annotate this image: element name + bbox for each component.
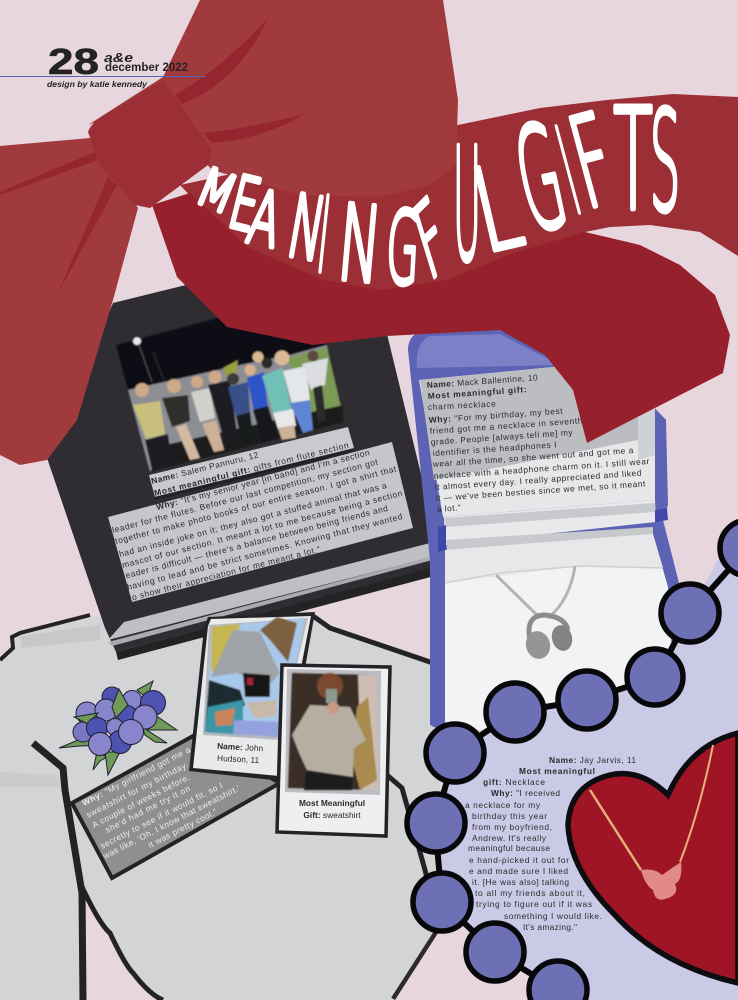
name caption: Salem: Most meaningful gift: gifts from flute section (153, 440, 350, 498)
quote: Mack: necklace with a headphone charm on it. I still wear (433, 456, 650, 481)
quote: Mack: it — we've been besties since we met, so it meant (435, 478, 646, 503)
title: L (461, 140, 534, 280)
icon: headphones charm (523, 615, 575, 662)
name caption: Salem: Name: Salem Pannuru, 12 (150, 450, 260, 486)
quote: Salem: having to lead and be strict sometimes. Knowing that they wanted (126, 511, 404, 592)
panel: John's quote box: was like, 'Oh, I know that sweatshirt.' (100, 783, 242, 861)
quote: Jay: something I would like. (504, 911, 602, 921)
title: I (313, 176, 334, 296)
quote: Mack: Why: "For my birthday, my best (428, 406, 563, 425)
ribbon bow (0, 0, 738, 465)
quote: Mack: it almost every day. I really appreciated and liked (434, 468, 642, 492)
quote: Jay: e hand-picked it out for (469, 855, 569, 865)
quote: Jay: Andrew. It's really (472, 833, 547, 843)
icon: blueberries (59, 681, 177, 775)
beaded necklace chain (407, 520, 738, 1000)
polaroid: John with gift: Hudson, 11 (217, 753, 260, 765)
panel: John's quote box: it was pretty cool." (146, 806, 219, 850)
title (188, 79, 680, 309)
panel: necklace box (408, 330, 690, 735)
quote: Salem (108, 442, 413, 603)
panel: John's quote box: secretly to see if it would fit, so I (98, 780, 224, 851)
quote: Jay: birthday this year (472, 811, 547, 821)
page header: design by katie kennedy (47, 79, 148, 89)
page header: 28 (48, 41, 99, 82)
panel: John's quote box: she'd had me try it on (103, 783, 192, 835)
panel: sweatshirt (0, 615, 445, 1000)
title: N (281, 177, 332, 281)
quote: Salem: had an inside joke on it; they also got a stuffed animal that was a (118, 480, 388, 559)
panel: John's quote box: Why: "My girlfriend got me a (80, 744, 192, 808)
team photo (116, 296, 343, 472)
quote: Mack: charm necklace (428, 398, 496, 412)
title: U (453, 115, 481, 296)
polaroid: John with gift: Name: John (217, 741, 264, 753)
quote: Jay: e and made sure I liked (469, 866, 568, 876)
quote: Jay: it. [He was also] talking (472, 877, 569, 887)
quote: Jay: from my boyfriend, (472, 822, 552, 832)
quote: Mack: a lot." (436, 502, 461, 514)
quote: Jay: gift: Necklace (483, 777, 545, 787)
quote: Jay: to all my friends about it, (475, 888, 585, 898)
quote: Mack: grade. People [always tell me] my (430, 427, 574, 447)
polaroid: John selfie: Most Meaningful (299, 798, 365, 808)
quote: Jay: It's amazing." (523, 922, 577, 932)
quote: Salem: leader is difficult — there's a balance between being friends and (122, 503, 389, 581)
page header: a&e (104, 50, 133, 65)
title: I (546, 103, 591, 241)
quote: Jay: meaningful because (468, 843, 550, 853)
quote: Salem: mascot of our section. It meant a lot to me because being a section (121, 488, 404, 570)
quote: Salem: together to make photo books of our entire season. I got a shirt that (114, 463, 398, 546)
title: A (241, 174, 288, 265)
quote: Jay: Most meaningful (519, 766, 595, 776)
polaroid: John selfie: Gift: sweatshirt (303, 810, 361, 820)
title: F (404, 176, 457, 303)
panel: John's quote box: sweatshirt for my birthday. (84, 760, 190, 820)
title: M (188, 157, 245, 226)
panel: pink gap under shirt (395, 925, 560, 1000)
panel: memory book (47, 284, 438, 660)
quote: Jay: a necklace for my (465, 800, 541, 810)
title: S (650, 83, 680, 243)
title: G (384, 191, 422, 309)
panel: John's quote box: A couple of weeks before, (90, 772, 191, 830)
quote: Mack: identifier is the headphones I (432, 439, 557, 458)
page header: december 2022 (105, 60, 188, 74)
quote: Jay (465, 755, 636, 932)
quote: Mack: friend got me a necklace in seventh (429, 415, 583, 436)
title: N (334, 183, 386, 307)
quote: Salem: to show their appreciation for me meant a lot." (128, 544, 321, 603)
icon: red heart with necklace (568, 733, 738, 983)
quote: Mack: Most meaningful gift: (427, 384, 527, 401)
polaroid: John selfie (277, 665, 390, 836)
page header (0, 41, 205, 89)
quote: Jay: Name: Jay Jarvis, 11 (549, 755, 636, 765)
polaroid: John with gift (189, 612, 315, 781)
quote: Salem: leader for the flutes. Before our last competition, my section got (111, 456, 379, 535)
panel: John's quote box (72, 736, 280, 878)
title: G (503, 95, 579, 265)
quote: Mack: wear all the time, so she went out and got me a (431, 445, 634, 469)
title: E (222, 160, 268, 248)
quote: Mack (426, 372, 650, 514)
quote: Salem: Why: "It's my senior year [in band] and I'm a section (155, 447, 371, 512)
panel: lavender necklace background (435, 520, 738, 1000)
title: F (557, 87, 629, 237)
quote: Mack: Name: Mack Ballentine, 10 (426, 372, 538, 390)
quote: Jay: trying to figure out if it was (476, 899, 592, 909)
title: T (613, 79, 653, 242)
quote: Jay: Why: "I received (491, 788, 560, 798)
